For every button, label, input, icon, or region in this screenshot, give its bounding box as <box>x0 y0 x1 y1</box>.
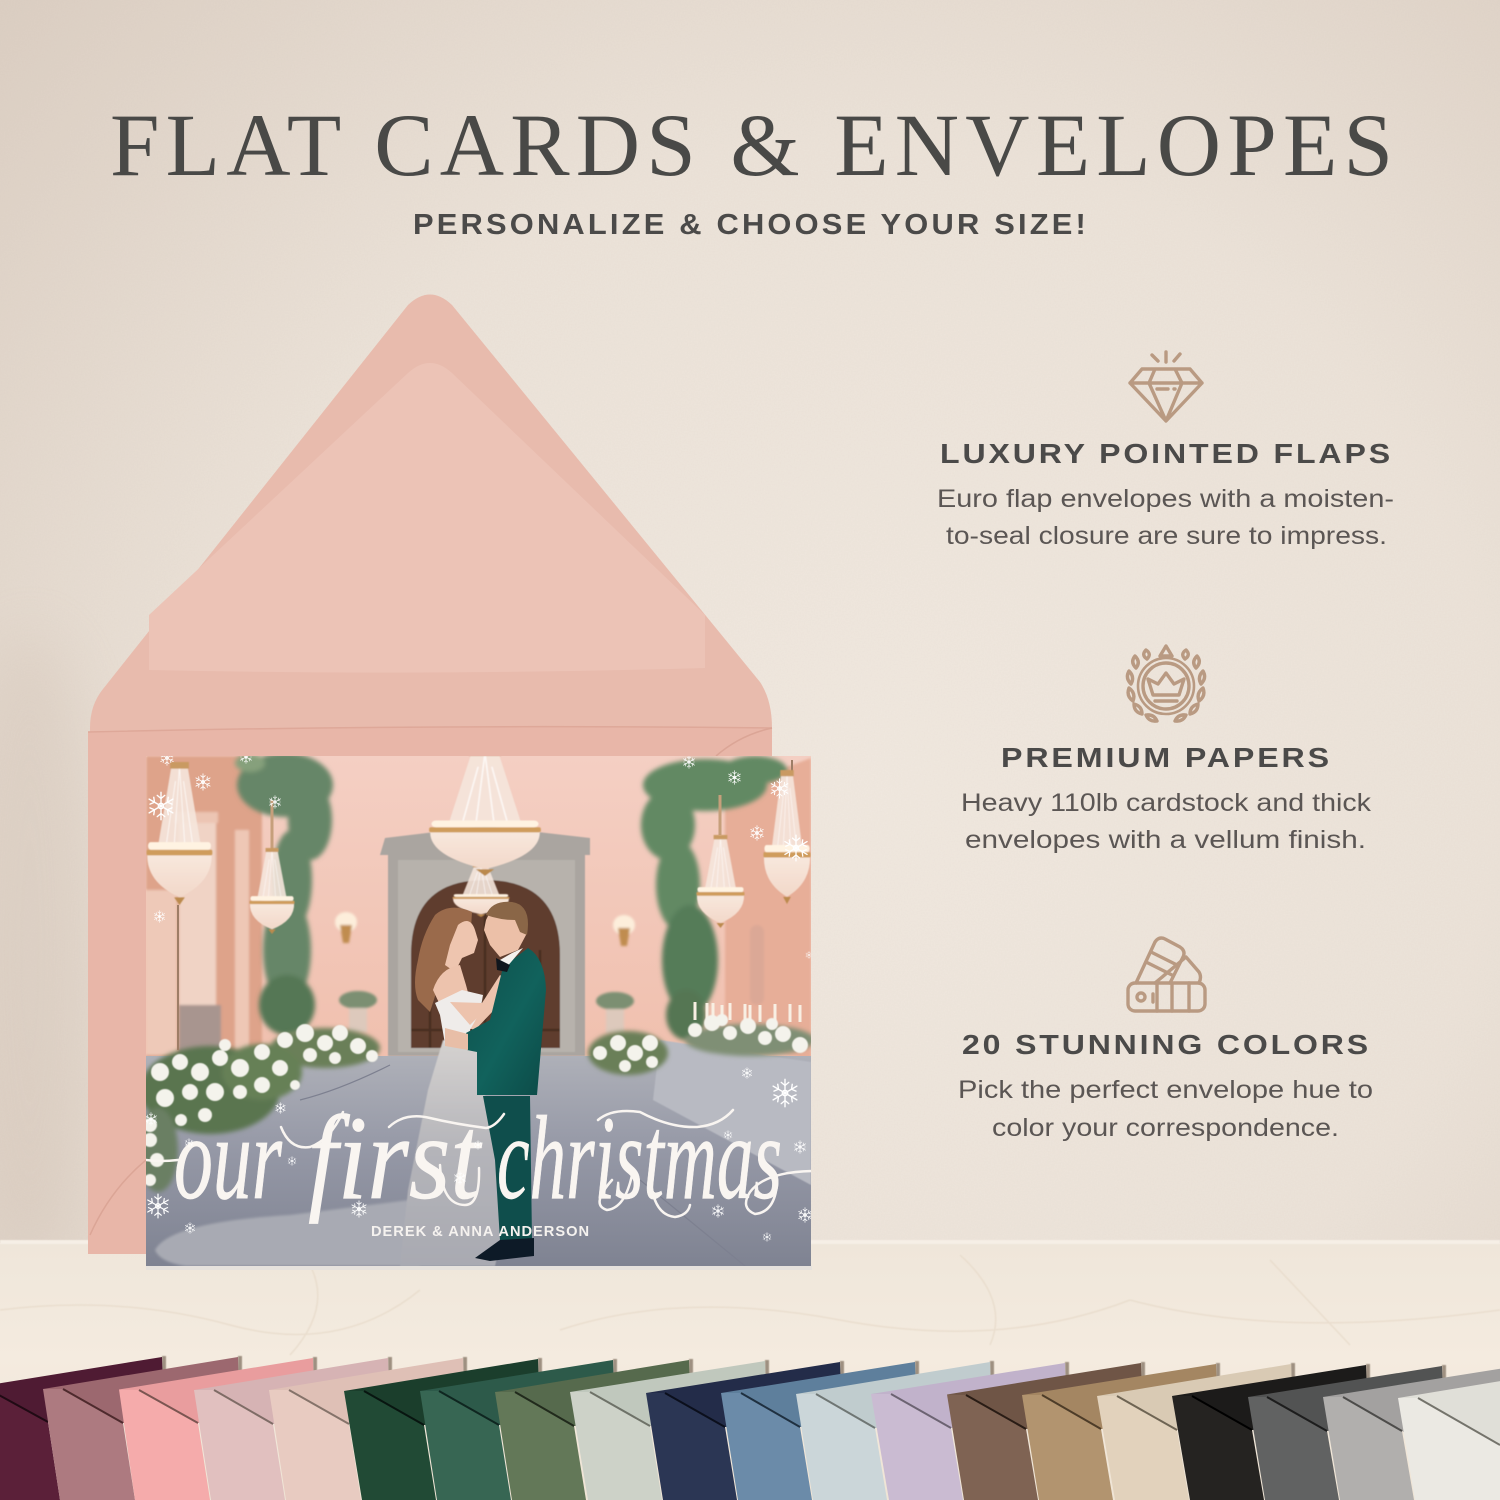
swatch: dusty rose <box>43 1357 240 1500</box>
feature: 20 stunning colors <box>958 938 1373 1142</box>
icon: colour swatches <box>1128 938 1205 1011</box>
photo wall <box>146 756 811 1076</box>
heading: LUXURY POINTED FLAPS <box>940 438 1393 469</box>
swatch: slate blue <box>721 1362 917 1500</box>
swatch: ivory <box>1398 1366 1500 1500</box>
heading: PREMIUM PAPERS <box>1001 742 1332 773</box>
greenery left <box>235 753 333 1035</box>
pink envelope <box>88 294 772 1254</box>
wall sconces <box>335 912 635 946</box>
swatch: black <box>1172 1365 1368 1500</box>
bride bodice <box>435 990 483 1048</box>
feature: luxury pointed flaps <box>937 352 1394 550</box>
swatch: peach <box>269 1358 465 1500</box>
description: Euro flap envelopes with a moisten- <box>937 485 1394 513</box>
icon: diamond <box>1130 352 1202 421</box>
names: DEREK & ANNA ANDERSON <box>371 1223 590 1240</box>
icon: crown badge <box>1127 646 1205 721</box>
groom shoes <box>475 1238 534 1261</box>
urns <box>339 991 634 1033</box>
bride face <box>445 921 478 972</box>
script flourishes <box>146 1110 812 1217</box>
bench <box>653 1040 811 1185</box>
envelope body <box>88 727 772 1254</box>
description <box>961 789 1372 854</box>
card bottom edge <box>146 1266 812 1270</box>
couple <box>400 902 546 1266</box>
stone door surround <box>380 826 590 1056</box>
swatch: charcoal <box>1248 1366 1444 1500</box>
swatch: coral pink <box>119 1358 315 1500</box>
description: to-seal closure are sure to impress. <box>946 522 1387 550</box>
swatch: pale blue <box>796 1362 992 1500</box>
swatch: lilac <box>871 1363 1067 1500</box>
snowflakes <box>145 751 812 1242</box>
swatch: maroon <box>0 1357 164 1500</box>
title: FLAT CARDS & ENVELOPES <box>110 97 1393 195</box>
bridal train <box>155 1200 420 1266</box>
bride dress <box>400 1040 505 1266</box>
script headline <box>146 1091 812 1224</box>
envelope flap <box>90 294 772 740</box>
groom hand <box>445 1028 468 1050</box>
swatch: blush <box>194 1358 390 1500</box>
candles <box>695 1002 800 1022</box>
groom trousers <box>483 1096 532 1240</box>
feature: premium papers <box>961 646 1372 854</box>
script headline: our <box>174 1091 283 1224</box>
heading: 20 STUNNING COLORS <box>962 1029 1371 1060</box>
swatch: cocoa <box>947 1363 1143 1500</box>
description: color your correspondence. <box>992 1114 1339 1142</box>
description <box>958 1076 1373 1142</box>
hydrangea flowers <box>138 1014 815 1192</box>
photo card <box>138 750 815 1266</box>
marble table <box>0 1240 1500 1500</box>
swatch: sage <box>570 1361 767 1500</box>
left arcade <box>146 756 262 1058</box>
script headline: christmas <box>497 1091 782 1224</box>
swatch: moss <box>495 1360 691 1500</box>
right arcade <box>725 758 811 1060</box>
envelope liner <box>149 363 705 673</box>
swatch: cream <box>1097 1364 1293 1500</box>
envelope colour swatches <box>0 1355 1500 1500</box>
swatch: forest green <box>344 1359 540 1500</box>
description: Pick the perfect envelope hue to <box>958 1076 1373 1104</box>
bride hair <box>415 908 472 1012</box>
ground <box>146 1056 811 1266</box>
swatch: emerald <box>420 1360 615 1500</box>
greenery right <box>641 756 787 1040</box>
subtitle: PERSONALIZE & CHOOSE YOUR SIZE! <box>413 209 1089 241</box>
swatch: navy <box>646 1362 842 1500</box>
description <box>937 485 1394 550</box>
description: Heavy 110lb cardstock and thick <box>961 789 1372 817</box>
swatch: tan <box>1022 1364 1218 1500</box>
swatch: silver <box>1323 1366 1500 1500</box>
description: envelopes with a vellum finish. <box>965 826 1366 854</box>
groom head <box>484 916 526 957</box>
script headline: first <box>308 1091 482 1224</box>
groom jacket <box>466 948 546 1095</box>
bride shoulder and arm <box>433 965 495 1030</box>
chandeliers <box>147 750 811 1050</box>
